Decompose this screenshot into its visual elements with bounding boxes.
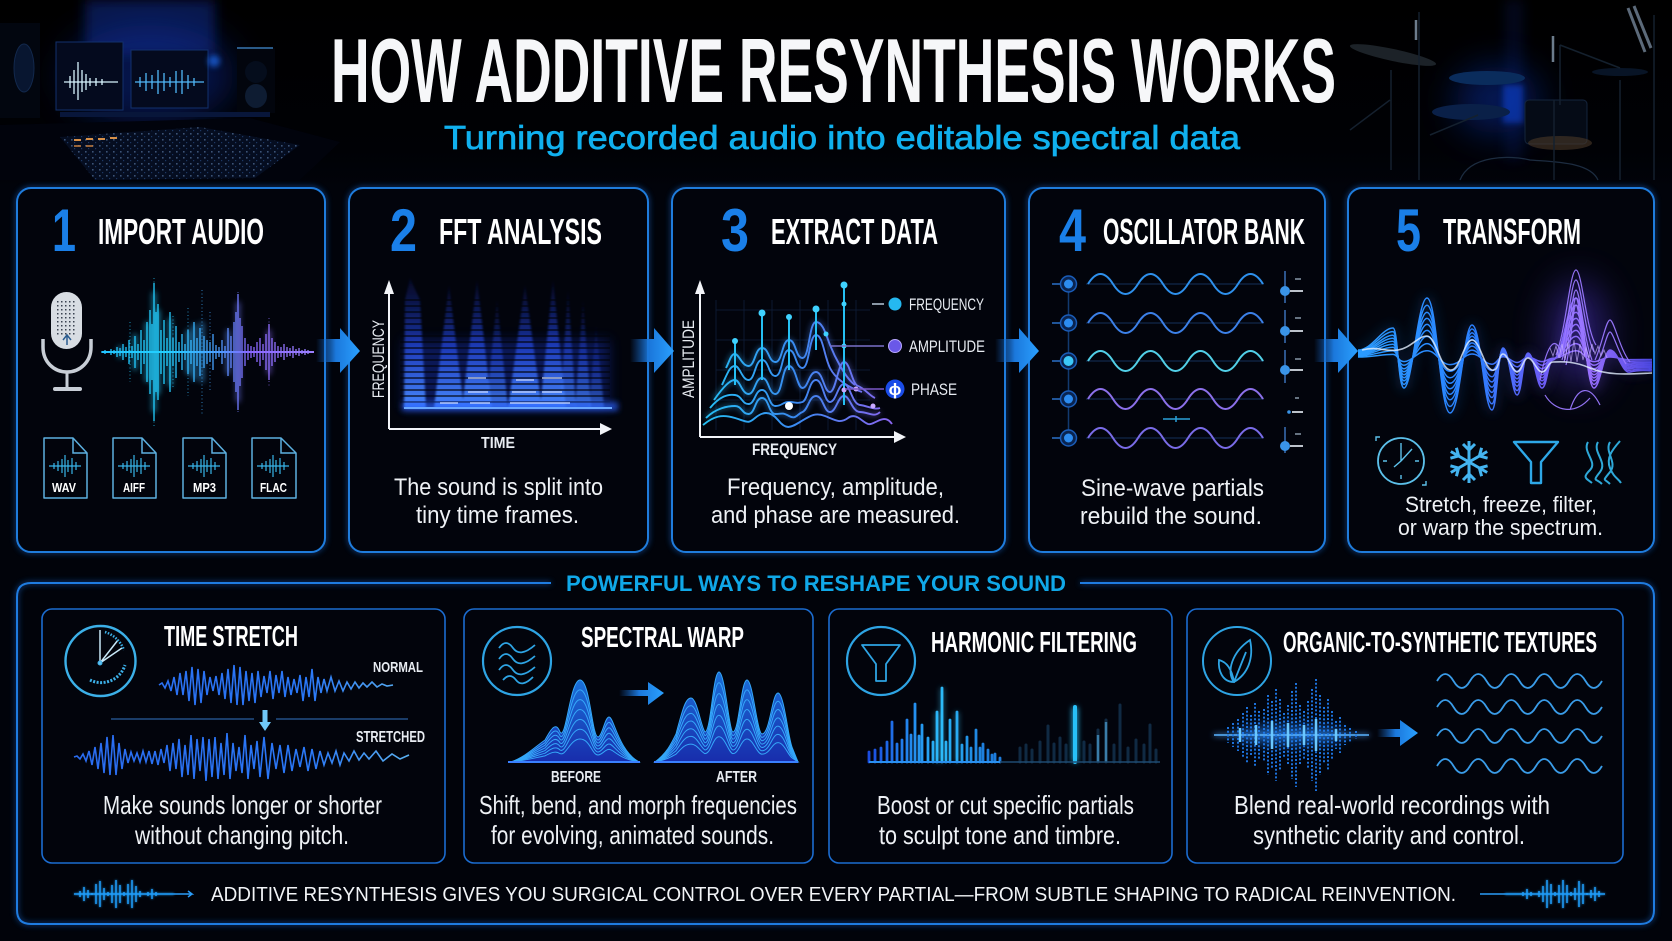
text: fft description: The sound is split into: [394, 474, 603, 501]
arrow: step 2 to 3: [630, 328, 674, 373]
legend: amplitude: AMPLITUDE: [909, 337, 985, 356]
number 2: 2: [390, 197, 417, 264]
footer: right waveform: [1480, 880, 1605, 908]
card: spectral warp: [464, 609, 813, 863]
heading: transform: TRANSFORM: [1443, 211, 1581, 252]
icon: funnel: [1514, 442, 1558, 483]
panel: step 3 extract data: [672, 188, 1005, 552]
panel: powerful ways to reshape: [17, 571, 1654, 924]
text: stretch description: Make sounds longer or shorter: [103, 790, 382, 820]
text: oscillator description: [1080, 475, 1264, 530]
sliders: [1280, 271, 1303, 453]
text: oscillator description: rebuild the sound.: [1080, 503, 1262, 530]
legend: phase: PHASE: [911, 380, 957, 399]
chart: partial data peaks: [695, 280, 906, 443]
icon: warp circle: [483, 627, 551, 695]
heading: import audio: IMPORT AUDIO: [98, 211, 264, 252]
axis label: time: TIME: [481, 435, 515, 452]
icon: flac file: [252, 438, 296, 498]
arrow: step 1 to 2: [316, 328, 360, 373]
text: filtering description: to sculpt tone and timbre.: [879, 820, 1121, 850]
legend: amplitude: [830, 337, 985, 356]
icon: clock: [1376, 437, 1426, 485]
icon: wav file: WAV: [52, 480, 76, 495]
subtitle: Turning recorded audio into editable spectral data: [444, 119, 1241, 156]
heading: spectral warp: SPECTRAL WARP: [581, 622, 744, 654]
text: fft description: [394, 474, 603, 529]
icon: leaf circle: [1203, 627, 1271, 695]
arrow: step 4 to 5: [1314, 328, 1358, 373]
background: drum kit: [1349, 0, 1654, 180]
chart: before hills: [508, 680, 640, 762]
chart: partials bars: [869, 688, 1160, 762]
chart: after hills: [654, 672, 798, 762]
panel: step 2 fft analysis: [349, 188, 648, 552]
icon: mp3 file: [183, 438, 226, 498]
legend: phase: ϕ: [889, 380, 902, 399]
number 3: 3: [721, 197, 749, 264]
icon: flac file: FLAC: [260, 480, 287, 495]
background: recording studio: [0, 0, 340, 180]
text: textures description: synthetic clarity and control.: [1253, 820, 1525, 850]
icon: wav file: [44, 438, 87, 498]
chart: spectrogram: [384, 278, 618, 435]
waveform: normal: [159, 665, 393, 705]
text: fft description: tiny time frames.: [416, 502, 579, 529]
text: extract description: [711, 474, 960, 529]
legend: frequency: [872, 295, 984, 314]
panel: step 4 oscillator bank: [1029, 188, 1325, 552]
text: warp description: Shift, bend, and morph frequencies: [479, 790, 797, 820]
label: stretched: STRETCHED: [356, 729, 425, 746]
waveform: transformed spectrum: [1358, 270, 1652, 413]
card: harmonic filtering: [829, 609, 1172, 863]
label: normal: NORMAL: [373, 659, 423, 676]
text: warp description: [479, 790, 797, 850]
icon: aiff file: [113, 438, 156, 498]
text: transform description: or warp the spectrum.: [1398, 515, 1603, 540]
text: extract description: and phase are measured.: [711, 502, 960, 529]
text: oscillator description: Sine-wave partials: [1081, 475, 1264, 502]
waves: synthetic: [1437, 674, 1602, 773]
text: stretch description: without changing pitch.: [134, 820, 349, 850]
number 1: 1: [52, 197, 76, 264]
number 4: 4: [1059, 197, 1087, 264]
label: after: AFTER: [716, 769, 757, 786]
arrow: step 3 to 4: [995, 328, 1039, 373]
waveform: stretched: [74, 733, 409, 781]
text: filtering description: Boost or cut specific partials: [877, 790, 1134, 820]
icon: aiff file: AIFF: [123, 480, 145, 495]
chart axes: [700, 292, 896, 437]
number 5: 5: [1396, 197, 1421, 264]
icon: filter circle: [847, 627, 915, 695]
icon: mp3 file: MP3: [193, 480, 216, 495]
text: filtering description: [877, 790, 1134, 850]
axis label: amplitude: AMPLITUDE: [679, 320, 698, 398]
icon: snowflake: [1448, 441, 1490, 483]
chart axes: [389, 290, 602, 429]
icon: warp waves: [1586, 441, 1621, 484]
card: organic to synthetic textures: [1187, 609, 1623, 863]
text: stretch description: [103, 790, 382, 850]
text: extract description: Frequency, amplitude,: [727, 474, 944, 501]
heading: oscillator bank: OSCILLATOR BANK: [1103, 211, 1305, 252]
icon: microphone: [43, 292, 91, 391]
heading: time stretch: TIME STRETCH: [164, 621, 298, 653]
text: transform description: [1398, 492, 1603, 540]
label: before: BEFORE: [551, 769, 601, 786]
heading: extract data: EXTRACT DATA: [771, 211, 938, 252]
arrow: organic to synthetic: [1377, 720, 1418, 746]
text: warp description: for evolving, animated sounds.: [491, 820, 774, 850]
legend: phase: [845, 380, 957, 399]
card: time stretch: [42, 609, 445, 863]
waveform: organic granular: [1214, 679, 1369, 791]
panel: step 1 import audio: [17, 188, 325, 552]
heading: powerful ways: POWERFUL WAYS TO RESHAPE YOUR SOUND: [566, 571, 1066, 596]
footer: summary statement: ADDITIVE RESYNTHESIS GIVES YOU SURGICAL CONTROL OVER EVERY PARTIAL—FROM SUBTLE SHAPING TO RADICAL REINVENTION.: [211, 883, 1456, 906]
footer: left waveform: [74, 880, 192, 908]
axis label: frequency: FREQUENCY: [369, 320, 388, 398]
waveform: imported audio: [102, 278, 314, 426]
legend: frequency: FREQUENCY: [909, 295, 984, 314]
arrow: before to after: [619, 682, 664, 705]
heading: fft analysis: FFT ANALYSIS: [439, 211, 602, 252]
icon: stretch clock: [66, 626, 136, 696]
text: textures description: [1234, 790, 1550, 850]
diagram: oscillator rows: [1052, 271, 1303, 453]
panel: step 5 transform: [1348, 188, 1654, 552]
heading: harmonic filtering: HARMONIC FILTERING: [931, 627, 1137, 659]
text: textures description: Blend real-world recordings with: [1234, 790, 1550, 820]
divider with down arrow: [111, 710, 408, 731]
text: transform description: Stretch, freeze, filter,: [1405, 492, 1597, 517]
axis label: frequency: FREQUENCY: [752, 440, 838, 459]
